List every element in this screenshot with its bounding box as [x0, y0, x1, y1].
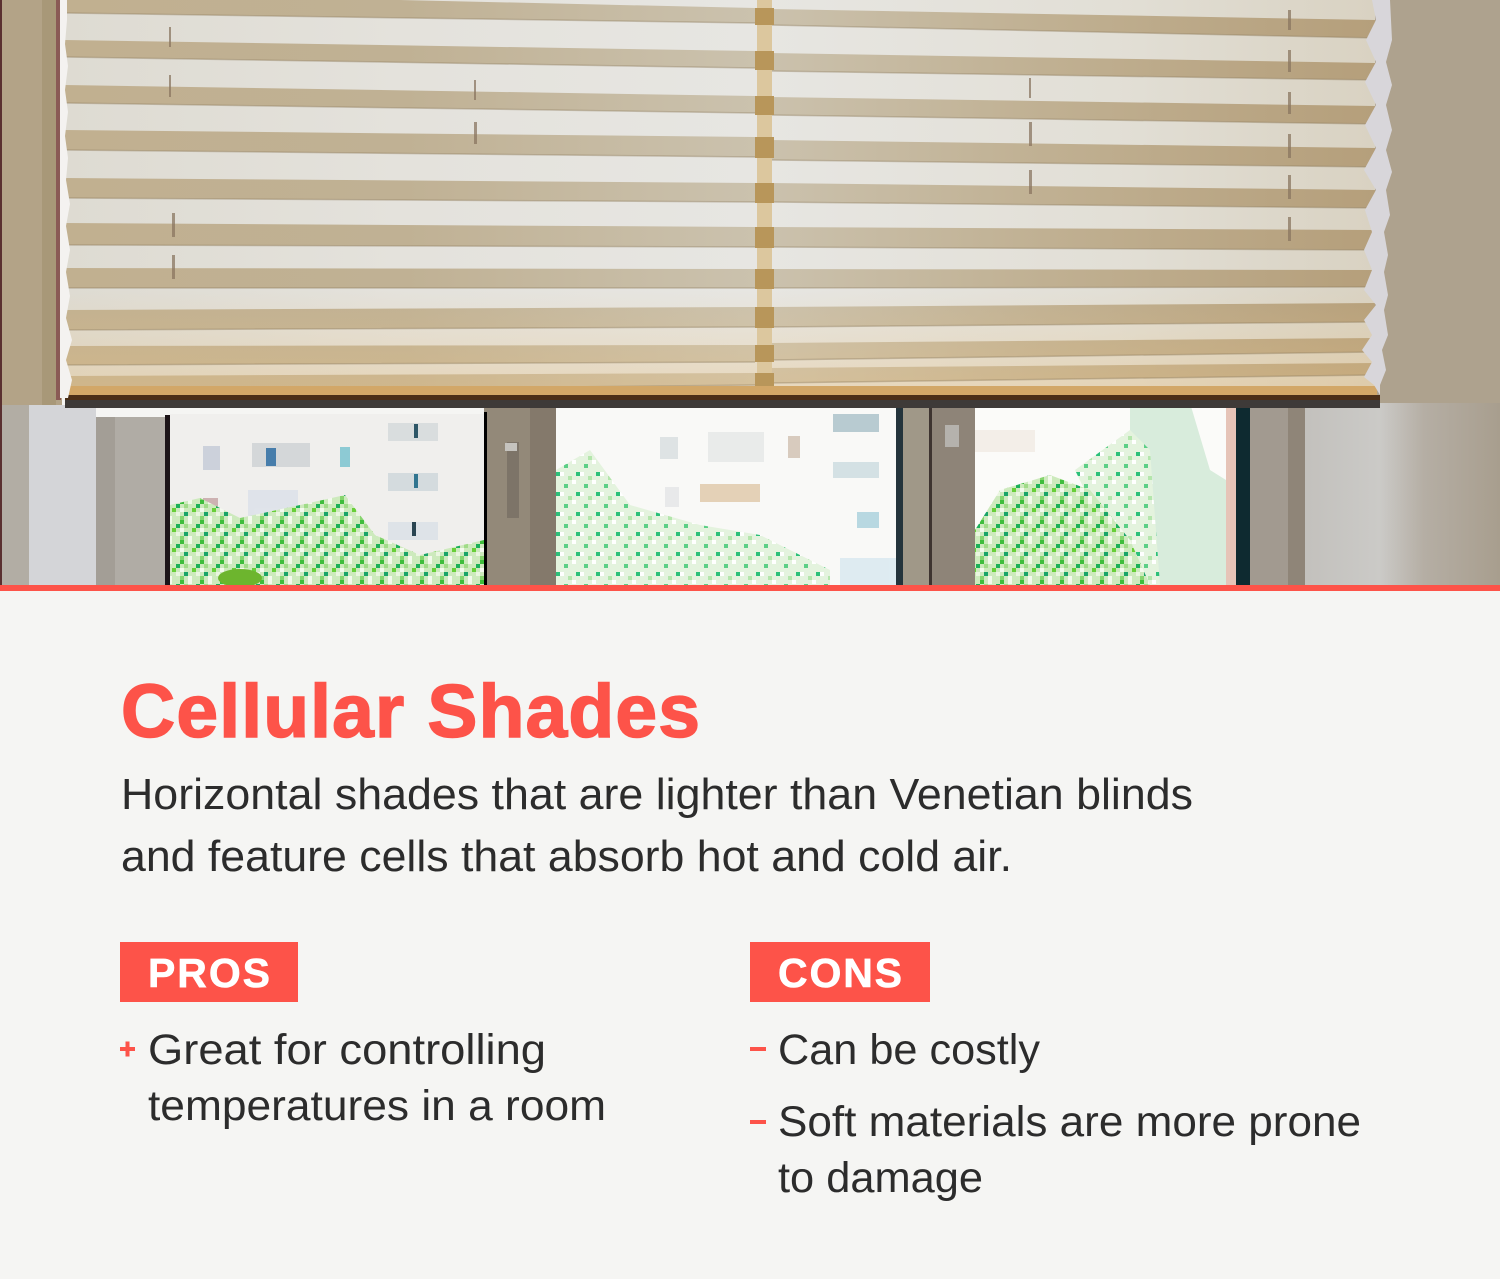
warm tint on lower pleats — [65, 290, 1375, 395]
pros badge — [120, 942, 298, 1002]
panel: pros — [120, 942, 606, 1130]
pleats: left half — [65, 0, 755, 392]
cons badge — [750, 942, 930, 1002]
shade edges — [60, 0, 72, 398]
heading: Cellular Shades — [121, 669, 700, 753]
cons item: damage — [750, 1098, 1361, 1202]
description — [121, 770, 1193, 881]
cons item: cost: Can be costly — [778, 1026, 1040, 1074]
cons item: damage: Soft materials are more prone — [778, 1098, 1361, 1146]
cellular shade — [60, 0, 1392, 408]
description: Horizontal shades that are lighter than Venetian blinds — [121, 770, 1193, 819]
outside view: left pane — [170, 414, 484, 587]
right wall — [1300, 0, 1500, 585]
pros badge: PROS — [148, 950, 270, 996]
cord ticks — [169, 10, 1291, 279]
window frames — [165, 403, 1305, 585]
minus icon — [750, 1120, 766, 1124]
outside view: middle pane — [556, 408, 896, 585]
outside view: right pane — [975, 403, 1226, 585]
center cord — [755, 0, 774, 392]
pros item: temperatures in a room — [148, 1082, 606, 1130]
left wall — [0, 0, 165, 585]
bottom rail — [65, 386, 1380, 408]
pleats: right half — [770, 9, 1375, 383]
pros item: Great for controlling — [148, 1026, 546, 1074]
accent divider line — [0, 585, 1500, 591]
plus icon — [120, 1042, 135, 1056]
photo: window with cellular shade — [0, 0, 1500, 587]
cons item: damage: to damage — [778, 1154, 983, 1202]
description: and feature cells that absorb hot and cold air. — [121, 832, 1012, 881]
minus icon — [750, 1047, 766, 1051]
crease shadows — [65, 13, 1375, 392]
panel: cons — [750, 942, 1361, 1202]
cons badge: CONS — [778, 950, 902, 996]
pros item — [120, 1026, 606, 1130]
